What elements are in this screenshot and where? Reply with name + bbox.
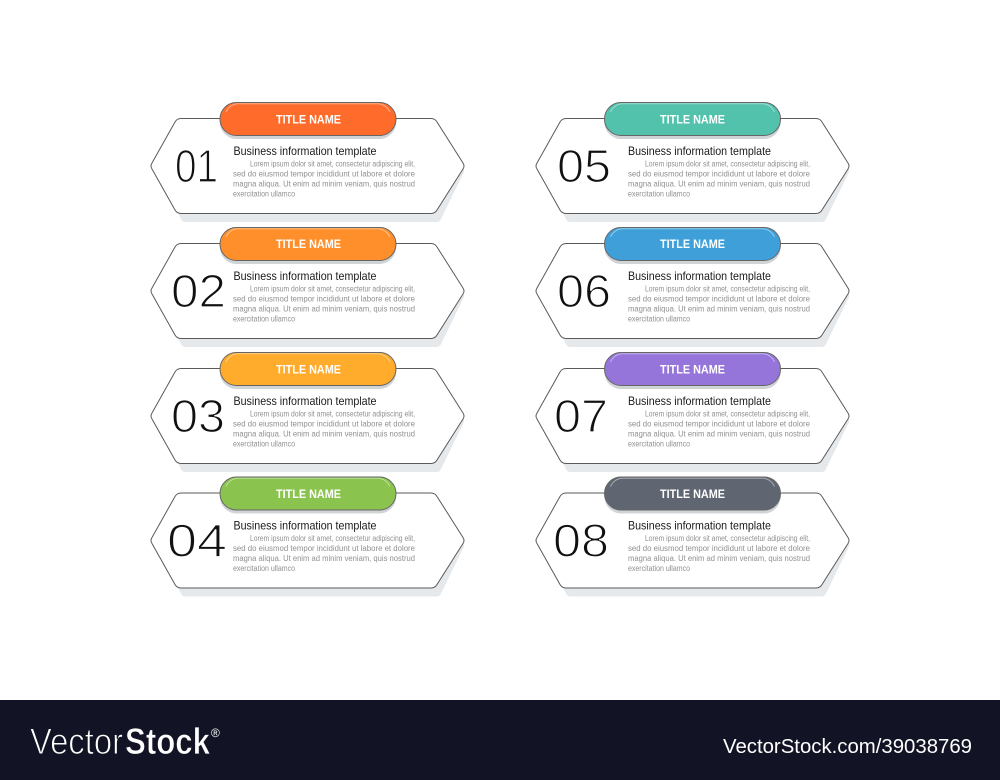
text block: Business information template <box>628 269 771 283</box>
card 02 <box>151 228 464 347</box>
card 01 <box>151 102 464 222</box>
title pill <box>220 352 396 389</box>
title pill: TITLE NAME <box>276 237 341 251</box>
text block: sed do eiusmod tempor incididunt ut labore et dolore <box>628 294 810 304</box>
text block: magna aliqua. Ut enim ad minim veniam, quis nostrud <box>233 180 415 188</box>
text block: sed do eiusmod tempor incididunt ut labore et dolore <box>233 170 415 178</box>
footer logo <box>30 721 220 762</box>
title pill <box>220 228 396 264</box>
title pill <box>604 102 780 139</box>
text block <box>233 144 415 198</box>
number: 05 <box>557 140 611 192</box>
text block: Lorem ipsum dolor sit amet, consectetur adipiscing elit, <box>250 534 415 543</box>
number: 01 <box>175 140 218 192</box>
text block: magna aliqua. Ut enim ad minim veniam, quis nostrud <box>628 554 810 563</box>
text block: exercitation ullamco <box>628 190 691 198</box>
text block <box>233 269 415 324</box>
number: 04 <box>167 514 227 566</box>
title pill: TITLE NAME <box>276 487 341 501</box>
footer url: VectorStock.com/39038769 <box>723 736 972 758</box>
text block: magna aliqua. Ut enim ad minim veniam, quis nostrud <box>233 430 415 438</box>
text block: Lorem ipsum dolor sit amet, consectetur adipiscing elit, <box>250 160 415 168</box>
text block: Business information template <box>234 518 377 532</box>
footer logo: ® <box>211 726 220 740</box>
text block: Business information template <box>628 518 771 532</box>
title pill <box>220 102 396 139</box>
text block: Lorem ipsum dolor sit amet, consectetur adipiscing elit, <box>645 160 810 168</box>
title pill <box>604 352 780 389</box>
number: 08 <box>553 514 609 566</box>
text block: magna aliqua. Ut enim ad minim veniam, quis nostrud <box>628 180 810 188</box>
card 04 <box>151 477 464 596</box>
text block: magna aliqua. Ut enim ad minim veniam, quis nostrud <box>628 430 810 438</box>
text block: sed do eiusmod tempor incididunt ut labore et dolore <box>233 420 415 428</box>
text block: Business information template <box>628 144 771 158</box>
text block <box>233 518 415 573</box>
text block <box>628 518 810 573</box>
text block: sed do eiusmod tempor incididunt ut labore et dolore <box>233 294 415 304</box>
text block: Business information template <box>234 269 377 283</box>
card 07 <box>536 352 849 472</box>
text block: Lorem ipsum dolor sit amet, consectetur adipiscing elit, <box>645 284 810 294</box>
text block: sed do eiusmod tempor incididunt ut labore et dolore <box>628 544 810 553</box>
footer logo: Stock <box>125 721 210 762</box>
text block: exercitation ullamco <box>233 440 296 448</box>
title pill <box>604 228 780 264</box>
text block: magna aliqua. Ut enim ad minim veniam, quis nostrud <box>628 304 810 314</box>
text block: Lorem ipsum dolor sit amet, consectetur adipiscing elit, <box>250 284 415 294</box>
text block: magna aliqua. Ut enim ad minim veniam, quis nostrud <box>233 554 415 563</box>
card 08 <box>536 477 849 596</box>
title pill: TITLE NAME <box>276 362 341 376</box>
card 03 <box>151 352 464 472</box>
text block: exercitation ullamco <box>628 440 691 448</box>
footer bar <box>0 700 1000 780</box>
text block: exercitation ullamco <box>233 314 296 324</box>
text block: exercitation ullamco <box>628 564 691 573</box>
card 05 <box>536 102 849 222</box>
text block: Business information template <box>234 394 377 408</box>
text block: Lorem ipsum dolor sit amet, consectetur adipiscing elit, <box>250 410 415 418</box>
title pill <box>220 477 396 514</box>
text block: sed do eiusmod tempor incididunt ut labore et dolore <box>628 170 810 178</box>
footer logo: Vector <box>30 721 123 762</box>
text block: exercitation ullamco <box>233 190 296 198</box>
text block: exercitation ullamco <box>628 314 691 324</box>
title pill: TITLE NAME <box>660 487 725 501</box>
text block <box>628 144 810 198</box>
text block <box>628 394 810 448</box>
number: 02 <box>171 265 226 317</box>
title pill <box>604 477 780 514</box>
text block: Lorem ipsum dolor sit amet, consectetur adipiscing elit, <box>645 534 810 543</box>
title pill: TITLE NAME <box>276 112 341 126</box>
text block: sed do eiusmod tempor incididunt ut labore et dolore <box>233 544 415 553</box>
title pill: TITLE NAME <box>660 112 725 126</box>
number: 03 <box>171 390 225 442</box>
text block <box>628 269 810 324</box>
text block: sed do eiusmod tempor incididunt ut labore et dolore <box>628 420 810 428</box>
text block: magna aliqua. Ut enim ad minim veniam, quis nostrud <box>233 304 415 314</box>
text block: exercitation ullamco <box>233 564 296 573</box>
text block: Lorem ipsum dolor sit amet, consectetur adipiscing elit, <box>645 410 810 418</box>
text block: Business information template <box>628 394 771 408</box>
text block <box>233 394 415 448</box>
number: 07 <box>554 390 608 442</box>
number: 06 <box>557 265 611 317</box>
title pill: TITLE NAME <box>660 237 725 251</box>
title pill: TITLE NAME <box>660 362 725 376</box>
text block: Business information template <box>234 144 377 158</box>
card 06 <box>536 228 849 347</box>
